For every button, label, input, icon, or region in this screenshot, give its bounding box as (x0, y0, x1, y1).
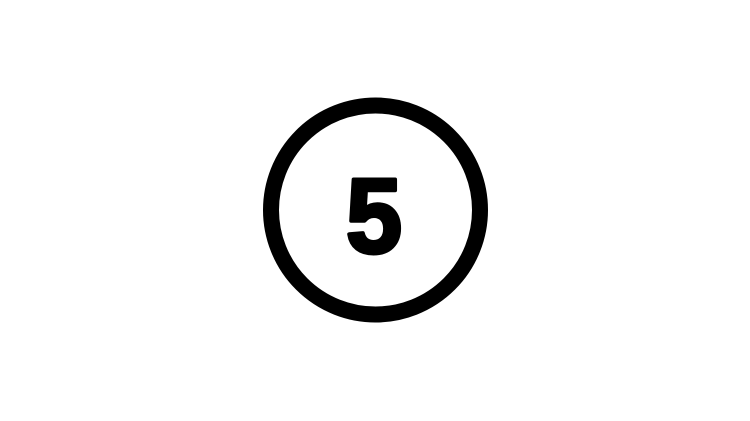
number 5: 5 (346, 158, 402, 276)
circle ring (271, 106, 480, 314)
